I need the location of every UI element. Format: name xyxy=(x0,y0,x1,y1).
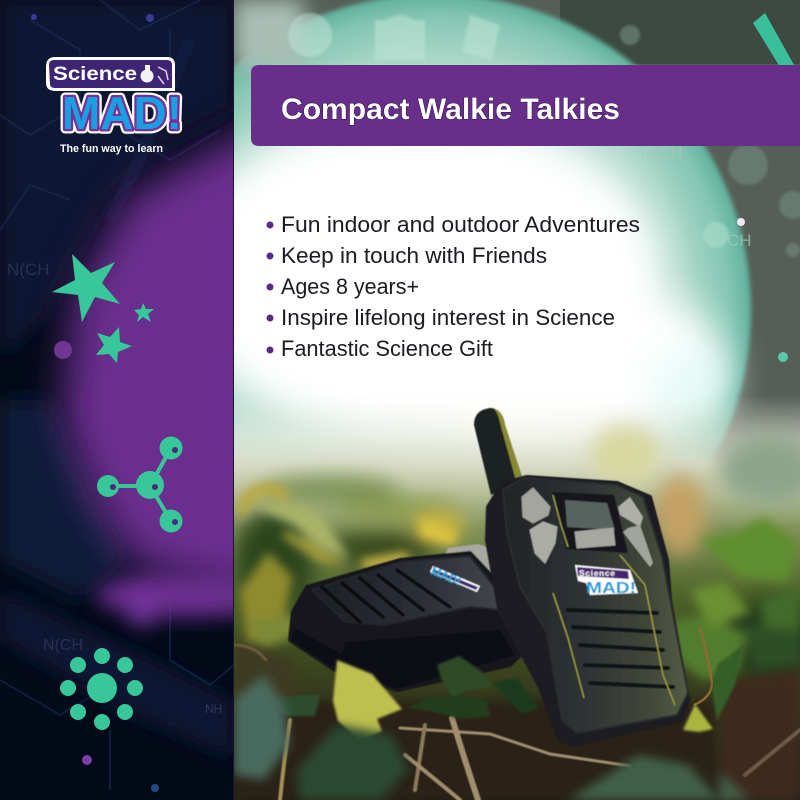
faint formula labels xyxy=(640,143,752,455)
panel: left science sidebar: NH xyxy=(205,702,222,716)
bullet list: Ages 8 years+ xyxy=(281,274,419,299)
title: Compact Walkie Talkies xyxy=(281,93,620,126)
icon: small star xyxy=(134,303,154,322)
faint formula labels: CH xyxy=(727,231,752,250)
logo: Science Mad: Science xyxy=(53,64,137,85)
faint formula labels: N(CH xyxy=(640,143,682,162)
logo tagline: The fun way to learn xyxy=(60,143,163,155)
ground and twigs xyxy=(234,700,714,800)
buttons xyxy=(522,488,550,523)
logo: Science Mad: MAD! xyxy=(62,87,182,139)
bullet list xyxy=(266,212,640,361)
purple wash xyxy=(38,108,233,616)
accent bar xyxy=(753,13,794,65)
logo sticker: Science xyxy=(579,568,615,578)
sticker xyxy=(429,564,480,592)
logo sticker xyxy=(575,565,638,597)
bullet list: Fun indoor and outdoor Adventures xyxy=(281,212,640,237)
faint formula labels: (CH xyxy=(644,433,680,455)
panel: outdoor photo xyxy=(234,395,800,800)
icon: medium star xyxy=(96,327,132,363)
panel: science background with white glow xyxy=(234,0,800,473)
title banner xyxy=(251,65,800,146)
panel: left science sidebar: N(CH xyxy=(43,637,83,654)
photo: front walkie talkie xyxy=(474,408,688,745)
logo: Science Mad: MAD! xyxy=(62,87,182,139)
sticker: MAD! xyxy=(429,564,463,589)
stem xyxy=(694,627,712,705)
photo: rear walkie talkie xyxy=(290,544,525,690)
photo: foreground leaves xyxy=(234,645,750,800)
icon: atom cluster xyxy=(60,648,143,730)
bullet list: Inspire lifelong interest in Science xyxy=(281,305,615,330)
logo: Science Mad: MAD! xyxy=(62,87,182,139)
bullet list: Keep in touch with Friends xyxy=(281,243,547,268)
icon: large star xyxy=(52,254,120,322)
panel: left science sidebar: N(CH xyxy=(7,260,50,279)
logo: Science Mad xyxy=(46,57,182,139)
panel: left science sidebar xyxy=(0,0,274,800)
bullet list: Fantastic Science Gift xyxy=(281,336,494,361)
icon: molecule xyxy=(97,436,182,532)
logo sticker: MAD! xyxy=(586,580,636,597)
glow xyxy=(234,127,748,454)
